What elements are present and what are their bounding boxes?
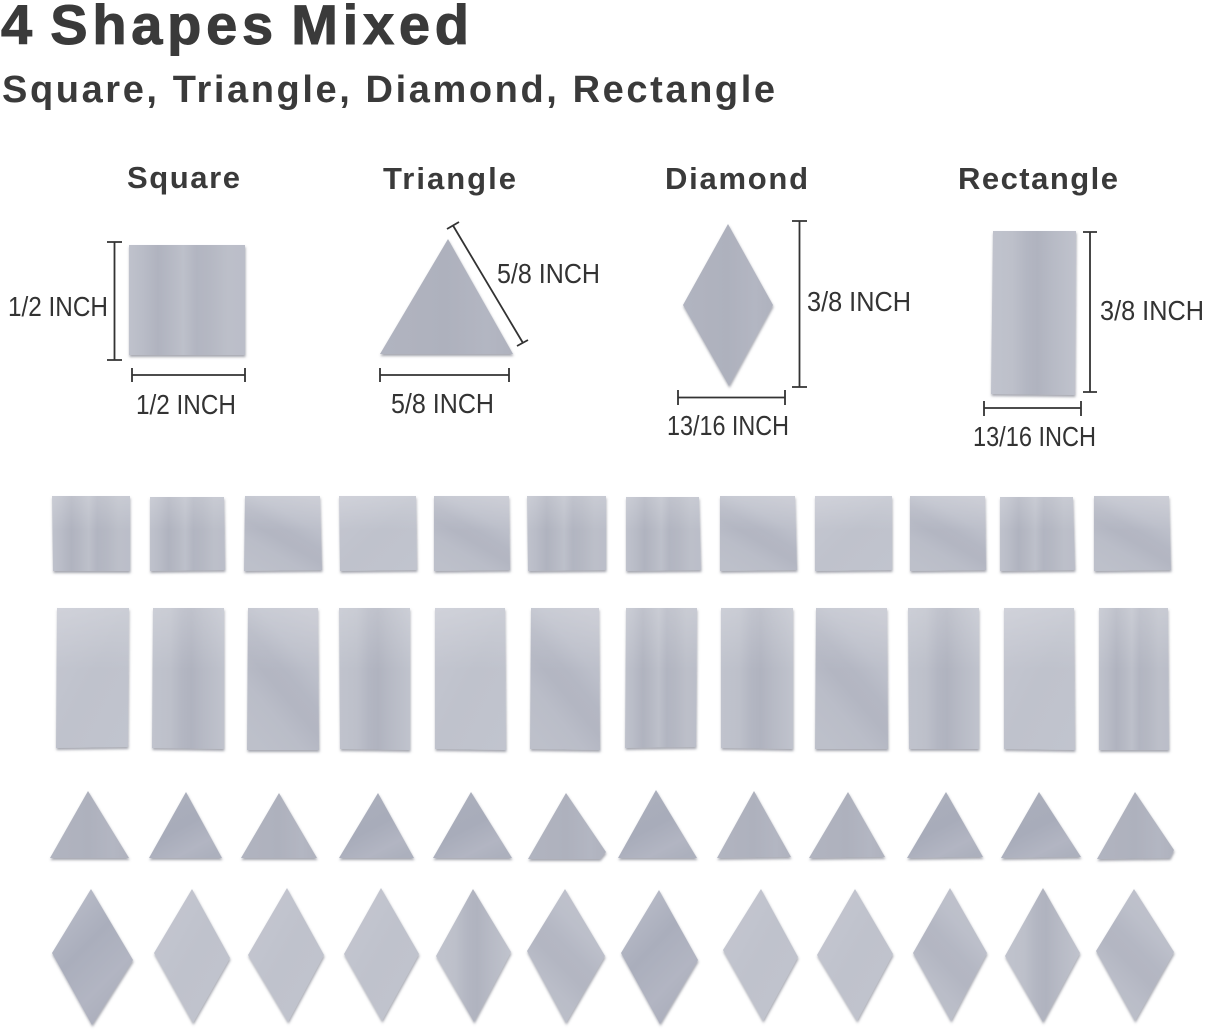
label: square width: 1/2 INCH: [136, 389, 236, 420]
heading: diamond: Diamond: [665, 161, 808, 196]
arrow: triangle base: [380, 368, 509, 382]
arrow: square width: [132, 368, 245, 382]
heading: triangle: Triangle: [383, 161, 516, 196]
label: diamond height: 3/8 INCH: [807, 286, 911, 317]
icon: square tile: [129, 245, 245, 355]
row of diamond tiles: [52, 888, 1174, 1025]
arrow: rectangle width: [984, 401, 1081, 416]
icon: triangle tile: [380, 239, 513, 354]
label: triangle base: 5/8 INCH: [391, 388, 494, 419]
arrow: diamond width: [678, 390, 785, 405]
arrow: rectangle height: [1083, 232, 1097, 392]
arrow: triangle side: [447, 222, 528, 346]
arrow: square height: [107, 242, 122, 360]
heading: rectangle: Rectangle: [958, 161, 1118, 196]
panel: rectangle dimensions: [958, 161, 1204, 452]
label: triangle side: 5/8 INCH: [497, 258, 600, 289]
subtitle: Square, Triangle, Diamond, Rectangle: [2, 69, 775, 111]
panel: diamond dimensions: [665, 161, 911, 441]
icon: rectangle tile: [991, 231, 1076, 395]
row of square tiles: [52, 496, 1171, 571]
label: diamond width: 13/16 INCH: [667, 410, 789, 441]
arrow: diamond height: [792, 221, 807, 387]
row of rectangle tiles: [56, 608, 1169, 750]
label: rectangle width: 13/16 INCH: [973, 421, 1096, 452]
panel: triangle dimensions: [380, 161, 600, 419]
icon: diamond tile: [683, 224, 773, 386]
row of triangle tiles: [50, 790, 1174, 859]
panel: square dimensions: [8, 160, 245, 420]
label: square height: 1/2 INCH: [8, 291, 108, 322]
heading: square: Square: [127, 160, 240, 195]
